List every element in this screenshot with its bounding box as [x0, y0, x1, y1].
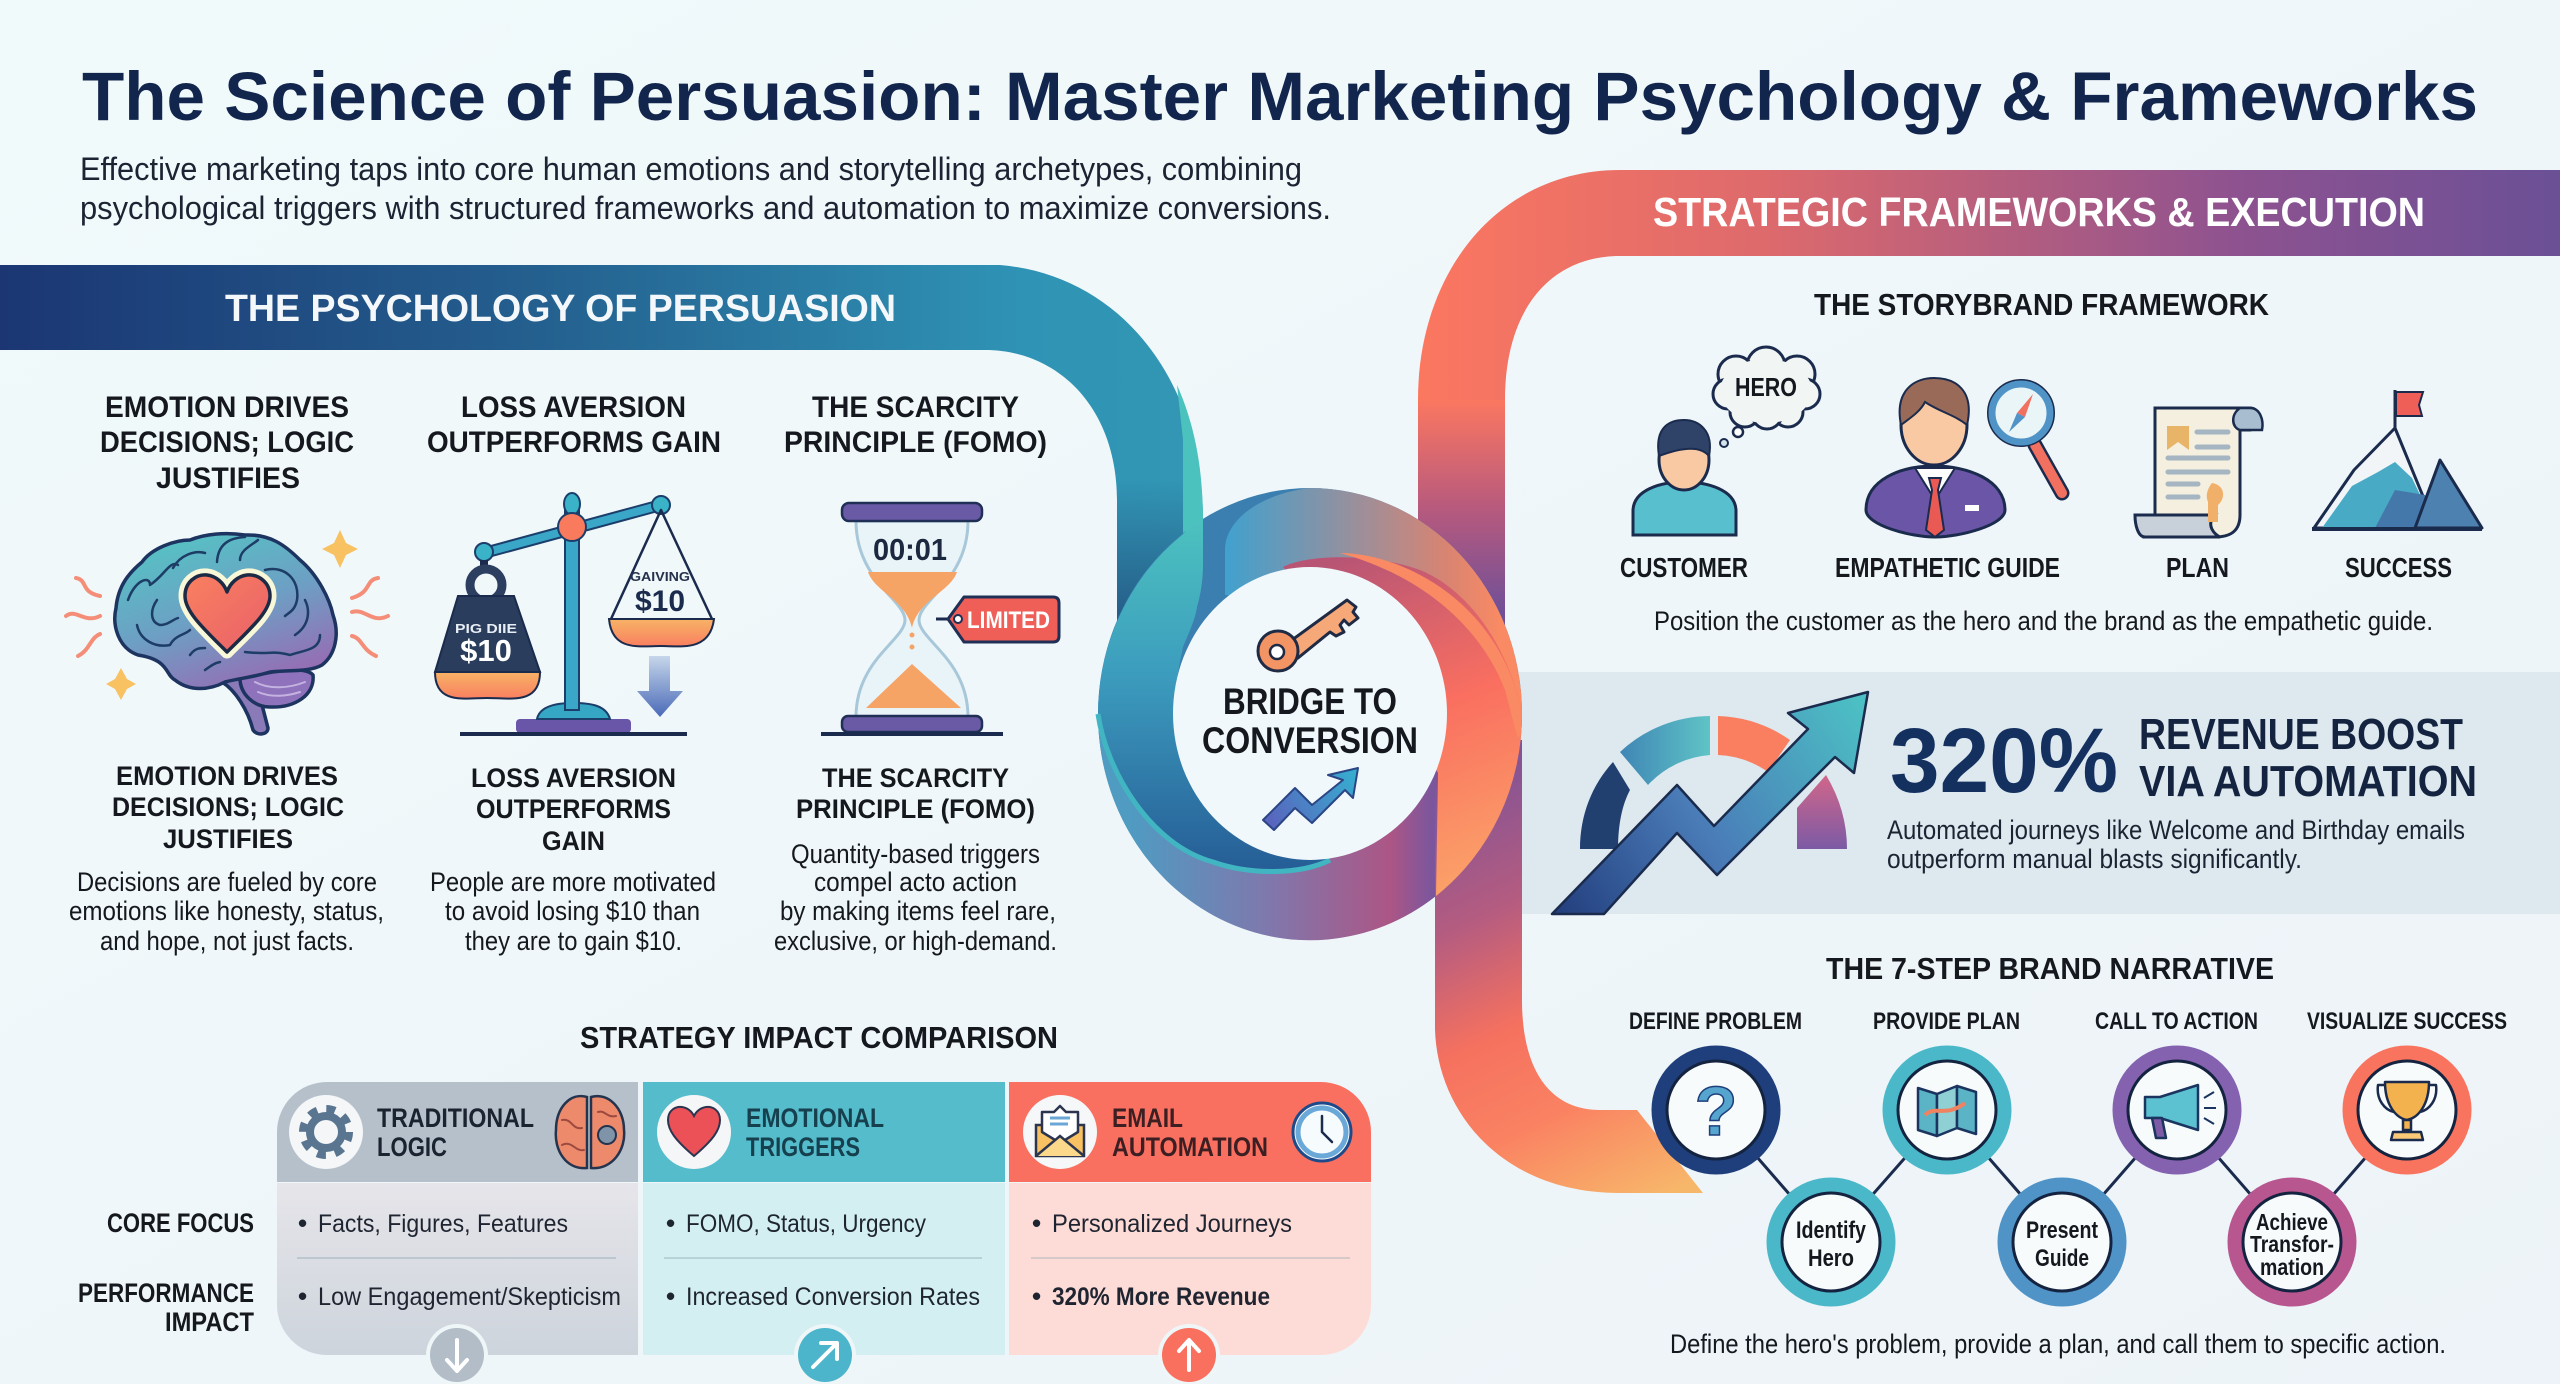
seven step diagram: [1629, 1008, 2507, 1299]
comparison table: [78, 1082, 1371, 1384]
step labels in circles: [1796, 1209, 2334, 1280]
column: email automation: AUTOMATION: [1112, 1132, 1268, 1162]
icon: customer with thought bubble: HERO: [1735, 372, 1797, 402]
column 3 heading: [784, 391, 1047, 459]
icon: balance scale: PIG DIIE: [455, 621, 517, 636]
column 2 text: LOSS AVERSION: [471, 763, 676, 793]
column: traditional logic: LOGIC: [377, 1132, 447, 1162]
ribbon: psychology of persuasion: THE PSYCHOLOGY OF PERSUASION: [225, 288, 896, 330]
seven step diagram: DEFINE PROBLEM: [1629, 1008, 1802, 1035]
column 1 text: emotions like honesty, status,: [69, 896, 384, 926]
step labels in circles: Guide: [2035, 1245, 2089, 1272]
column: email automation: •: [1032, 1281, 1041, 1311]
column: emotional triggers: •: [666, 1281, 675, 1311]
column: traditional logic: [289, 1095, 624, 1384]
stat: 320% revenue boost: 320%: [1890, 710, 2118, 812]
column 3 text: [774, 763, 1057, 956]
bridge label: BRIDGE TO: [1223, 681, 1397, 722]
intro text: Effective marketing taps into core human emotions and storytelling archetypes, combining: [80, 151, 1302, 187]
icon: balance scale: $10: [635, 585, 685, 618]
column 2 heading: LOSS AVERSION: [461, 391, 686, 424]
step labels in circles: mation: [2260, 1254, 2324, 1280]
panel band: revenue boost background: [1519, 672, 2560, 914]
icon: customer with thought bubble: [1633, 347, 1820, 535]
icon: hourglass with limited tag: 00:01: [873, 532, 947, 567]
step labels in circles: Hero: [1808, 1245, 1854, 1272]
column 1 heading: [100, 391, 354, 495]
icon: trophy: [2378, 1082, 2436, 1140]
icon: empathetic guide with magnifier: [1866, 378, 2062, 537]
column 2 text: [430, 763, 716, 956]
storybrand labels: PLAN: [2166, 552, 2229, 583]
column: email automation: 320% More Revenue: [1052, 1283, 1270, 1311]
column 3 heading: PRINCIPLE (FOMO): [784, 426, 1047, 459]
column: traditional logic: Facts, Figures, Features: [318, 1210, 568, 1238]
chart: gauge with rising arrow: [1552, 692, 1868, 914]
column: traditional logic: •: [298, 1281, 307, 1311]
bridge label: [1202, 681, 1418, 761]
column 2 text: they are to gain $10.: [465, 926, 682, 956]
stat: 320% revenue boost: Automated journeys like Welcome and Birthday emails: [1887, 815, 2465, 845]
column: email automation: [1023, 1095, 1351, 1384]
column: emotional triggers: EMOTIONAL: [746, 1103, 884, 1133]
intro text: [80, 151, 1331, 226]
intro text: psychological triggers with structured frameworks and automation to maximize conversions.: [80, 190, 1331, 226]
column 1 heading: EMOTION DRIVES: [105, 391, 349, 424]
icon: megaphone: [2145, 1085, 2216, 1138]
column: traditional logic: •: [298, 1208, 307, 1238]
ribbon: strategic frameworks: STRATEGIC FRAMEWORKS & EXECUTION: [1653, 189, 2425, 235]
step labels in circles: Identify: [1796, 1217, 1867, 1244]
heading: 7-step brand narrative: THE 7-STEP BRAND NARRATIVE: [1826, 951, 2274, 986]
seven step diagram: CALL TO ACTION: [2095, 1008, 2258, 1035]
column 2 text: OUTPERFORMS: [476, 794, 671, 824]
ribbon: strategic frameworks: [1418, 170, 2560, 640]
column 2 text: to avoid losing $10 than: [445, 896, 700, 926]
icon: map: [1918, 1086, 1976, 1136]
column: email automation: EMAIL: [1112, 1103, 1183, 1133]
step labels in circles: Present: [2026, 1217, 2098, 1244]
column 2 heading: OUTPERFORMS GAIN: [427, 426, 721, 459]
column: traditional logic: TRADITIONAL: [377, 1103, 534, 1133]
column 1 heading: DECISIONS; LOGIC: [100, 426, 354, 459]
seven step diagram: VISUALIZE SUCCESS: [2307, 1008, 2507, 1035]
storybrand labels: CUSTOMER: [1620, 552, 1748, 583]
column 3 text: PRINCIPLE (FOMO): [796, 794, 1035, 824]
stat: 320% revenue boost: REVENUE BOOST: [2139, 710, 2463, 759]
storybrand labels: SUCCESS: [2345, 552, 2452, 583]
ribbon: psychology of persuasion: [0, 265, 1203, 640]
column 1 text: Decisions are fueled by core: [77, 867, 377, 897]
icon: question mark: ?: [1695, 1072, 1737, 1150]
column 3 text: by making items feel rare,: [780, 896, 1056, 926]
icon: balance scale: GAIVING: [630, 569, 690, 584]
row labels: CORE FOCUS: [107, 1208, 254, 1238]
bridge label: CONVERSION: [1202, 720, 1418, 761]
icon: plan scroll: [2135, 408, 2262, 537]
column 1 text: and hope, not just facts.: [100, 926, 354, 956]
step labels in circles: Achieve: [2256, 1209, 2328, 1235]
icon: hourglass with limited tag: LIMITED: [967, 607, 1050, 634]
icon: balance scale: [435, 493, 714, 736]
icon: hourglass with limited tag: [821, 503, 1059, 736]
icon: balance scale: $10: [460, 633, 512, 668]
title: The Science of Persuasion: Master Marketing Psychology & Frameworks: [82, 58, 2478, 135]
stat: 320% revenue boost: outperform manual blasts significantly.: [1887, 844, 2302, 874]
column 1 text: JUSTIFIES: [163, 824, 293, 854]
column: emotional triggers: •: [666, 1208, 675, 1238]
icon: brain with heart: [66, 530, 388, 734]
heading: strategy impact comparison: STRATEGY IMPACT COMPARISON: [580, 1020, 1058, 1055]
column 3 text: compel acto action: [814, 867, 1017, 897]
stat: 320% revenue boost: VIA AUTOMATION: [2139, 757, 2477, 806]
column 1 text: DECISIONS; LOGIC: [112, 792, 344, 822]
central bridge ring: [1098, 488, 1703, 1193]
column: emotional triggers: TRIGGERS: [746, 1132, 860, 1162]
icon: mountain summit: [2312, 390, 2482, 531]
column: email automation: •: [1032, 1208, 1041, 1238]
column 2 text: People are more motivated: [430, 867, 716, 897]
column 2 text: GAIN: [542, 826, 605, 856]
row labels: PERFORMANCE: [78, 1278, 254, 1308]
column 3 text: THE SCARCITY: [822, 763, 1009, 793]
column: emotional triggers: FOMO, Status, Urgency: [686, 1210, 926, 1238]
icon: key: [1258, 600, 1358, 671]
column 3 heading: THE SCARCITY: [812, 391, 1019, 424]
column 1 text: [69, 761, 384, 956]
storybrand labels: EMPATHETIC GUIDE: [1835, 552, 2060, 583]
column: traditional logic: Low Engagement/Skepticism: [318, 1283, 621, 1311]
step labels in circles: Transfor-: [2250, 1231, 2334, 1257]
narrative caption: Define the hero's problem, provide a plan, and call them to specific action.: [1670, 1329, 2446, 1359]
column 1 text: EMOTION DRIVES: [116, 761, 338, 791]
column 1 heading: JUSTIFIES: [156, 462, 300, 495]
seven step diagram: PROVIDE PLAN: [1873, 1008, 2020, 1035]
storybrand labels: [1620, 552, 2452, 583]
column 3 text: Quantity-based triggers: [791, 839, 1040, 869]
storybrand caption: Position the customer as the hero and the brand as the empathetic guide.: [1654, 606, 2433, 636]
column 2 heading: [427, 391, 721, 459]
column: email automation: Personalized Journeys: [1052, 1210, 1292, 1238]
heading: storybrand framework: THE STORYBRAND FRAMEWORK: [1814, 287, 2270, 322]
stat: 320% revenue boost: [1887, 710, 2477, 874]
column: emotional triggers: [657, 1095, 980, 1384]
column: emotional triggers: Increased Conversion Rates: [686, 1283, 980, 1311]
icon: rising arrow: [1263, 768, 1358, 830]
column 3 text: exclusive, or high-demand.: [774, 926, 1057, 956]
row labels: IMPACT: [165, 1307, 254, 1337]
row labels: [78, 1208, 254, 1337]
